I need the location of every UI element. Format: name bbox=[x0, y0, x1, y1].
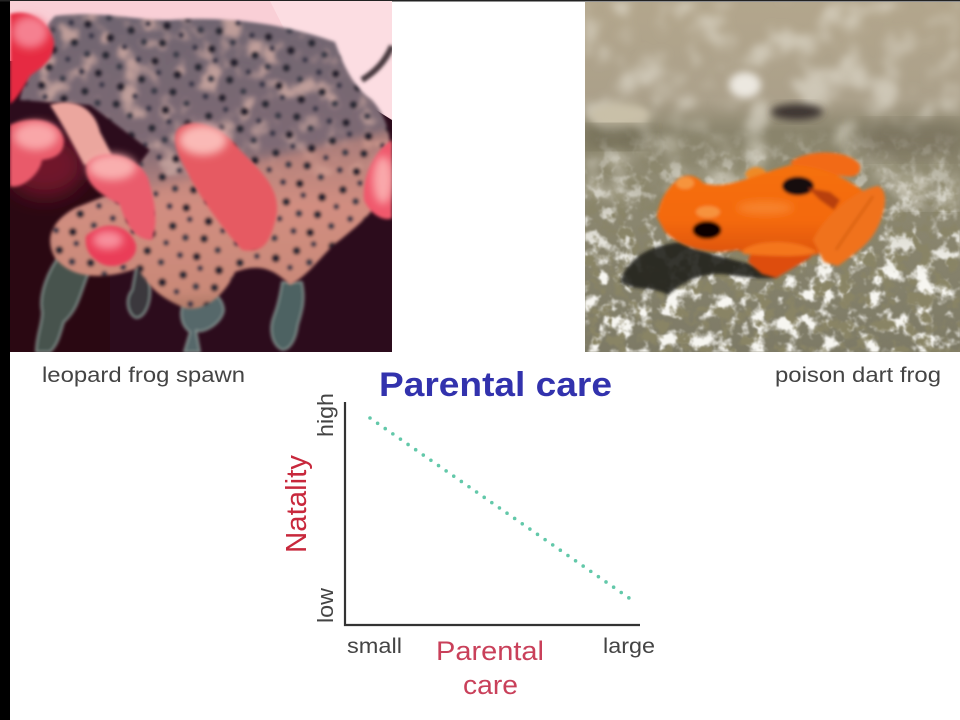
frog bbox=[657, 153, 885, 278]
spawn mass bbox=[10, 1, 392, 321]
fingers bbox=[10, 12, 393, 266]
heading: Parental care: Parental care bbox=[379, 366, 612, 404]
dotted trend line bbox=[370, 418, 632, 600]
x label: small: small bbox=[347, 635, 402, 658]
photo: leopard frog spawn bbox=[5, 1, 393, 352]
x label: large: large bbox=[603, 635, 655, 658]
photo: poison dart frog bbox=[585, 2, 960, 352]
y label: high: high bbox=[313, 393, 338, 437]
x axis title: Parental care: care bbox=[463, 670, 518, 700]
y label: low: low bbox=[313, 588, 338, 623]
caption: leopard frog spawn: leopard frog spawn bbox=[42, 363, 245, 387]
frog shadow bbox=[620, 242, 776, 295]
egg strands dripping bbox=[36, 254, 304, 352]
rock surface bbox=[585, 136, 960, 352]
left black edge strip bbox=[0, 0, 10, 720]
chart: natality vs parental care bbox=[281, 393, 655, 700]
y axis title: Natality: Natality bbox=[281, 454, 313, 553]
x axis title: Parental care: Parental bbox=[436, 636, 544, 666]
chart axes bbox=[345, 402, 640, 625]
caption: poison dart frog: poison dart frog bbox=[775, 363, 941, 387]
